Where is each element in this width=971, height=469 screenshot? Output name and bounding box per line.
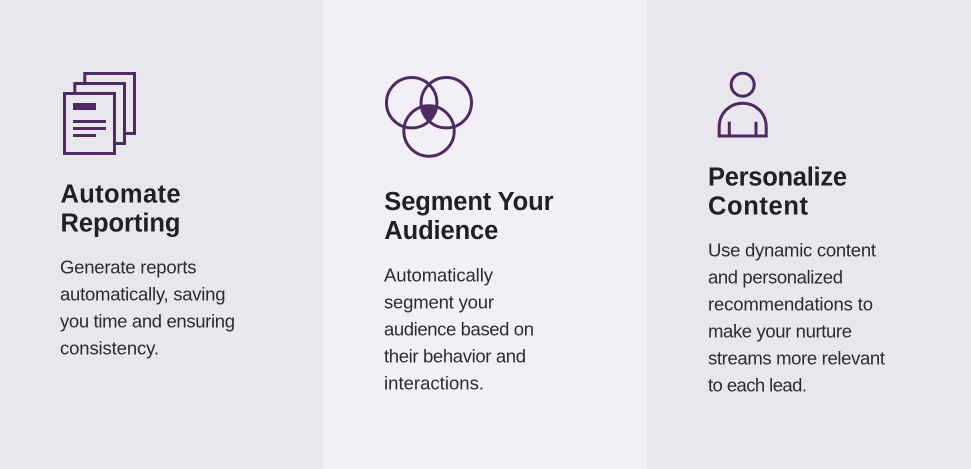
icon: stacked documents: [64, 74, 134, 154]
text: automate reporting description: you time and ensuring: [60, 310, 235, 331]
text: automate reporting description: Generate reports: [60, 256, 196, 277]
heading: automate reporting: [60, 181, 180, 238]
heading: segment your audience: Segment Your: [384, 188, 554, 216]
text: segment your audience description: interactions.: [384, 372, 484, 393]
text: personalize content description: and personalized: [708, 267, 843, 288]
heading: automate reporting: Automate: [60, 181, 180, 209]
icon: person: [719, 73, 766, 136]
text: segment your audience description: segment your: [384, 291, 494, 312]
text: personalize content description: to each lead.: [708, 375, 807, 396]
heading: automate reporting: Reporting: [60, 210, 180, 238]
text: personalize content description: [708, 240, 885, 396]
panel: personalize content: [647, 0, 971, 469]
text: personalize content description: recommendations to: [708, 294, 873, 315]
heading: personalize content: Personalize: [708, 164, 847, 192]
text: automate reporting description: consistency.: [60, 337, 159, 358]
text: automate reporting description: [60, 256, 235, 358]
text: segment your audience description: audience based on: [384, 318, 534, 339]
heading: personalize content: Content: [708, 192, 808, 220]
text: segment your audience description: Automatically: [384, 264, 494, 285]
heading: segment your audience: Audience: [384, 217, 498, 245]
text: segment your audience description: [384, 264, 534, 393]
heading: segment your audience: [384, 188, 554, 245]
heading: personalize content: [708, 164, 847, 220]
panel: automate reporting: [0, 0, 324, 469]
text: segment your audience description: their behavior and: [384, 345, 526, 366]
text: personalize content description: make your nurture: [708, 321, 852, 342]
icon: overlapping circles: [386, 78, 471, 156]
text: personalize content description: Use dynamic content: [708, 240, 876, 261]
panel: segment your audience: [324, 0, 647, 469]
text: personalize content description: streams more relevant: [708, 348, 885, 369]
text: automate reporting description: automatically, saving: [60, 283, 226, 304]
